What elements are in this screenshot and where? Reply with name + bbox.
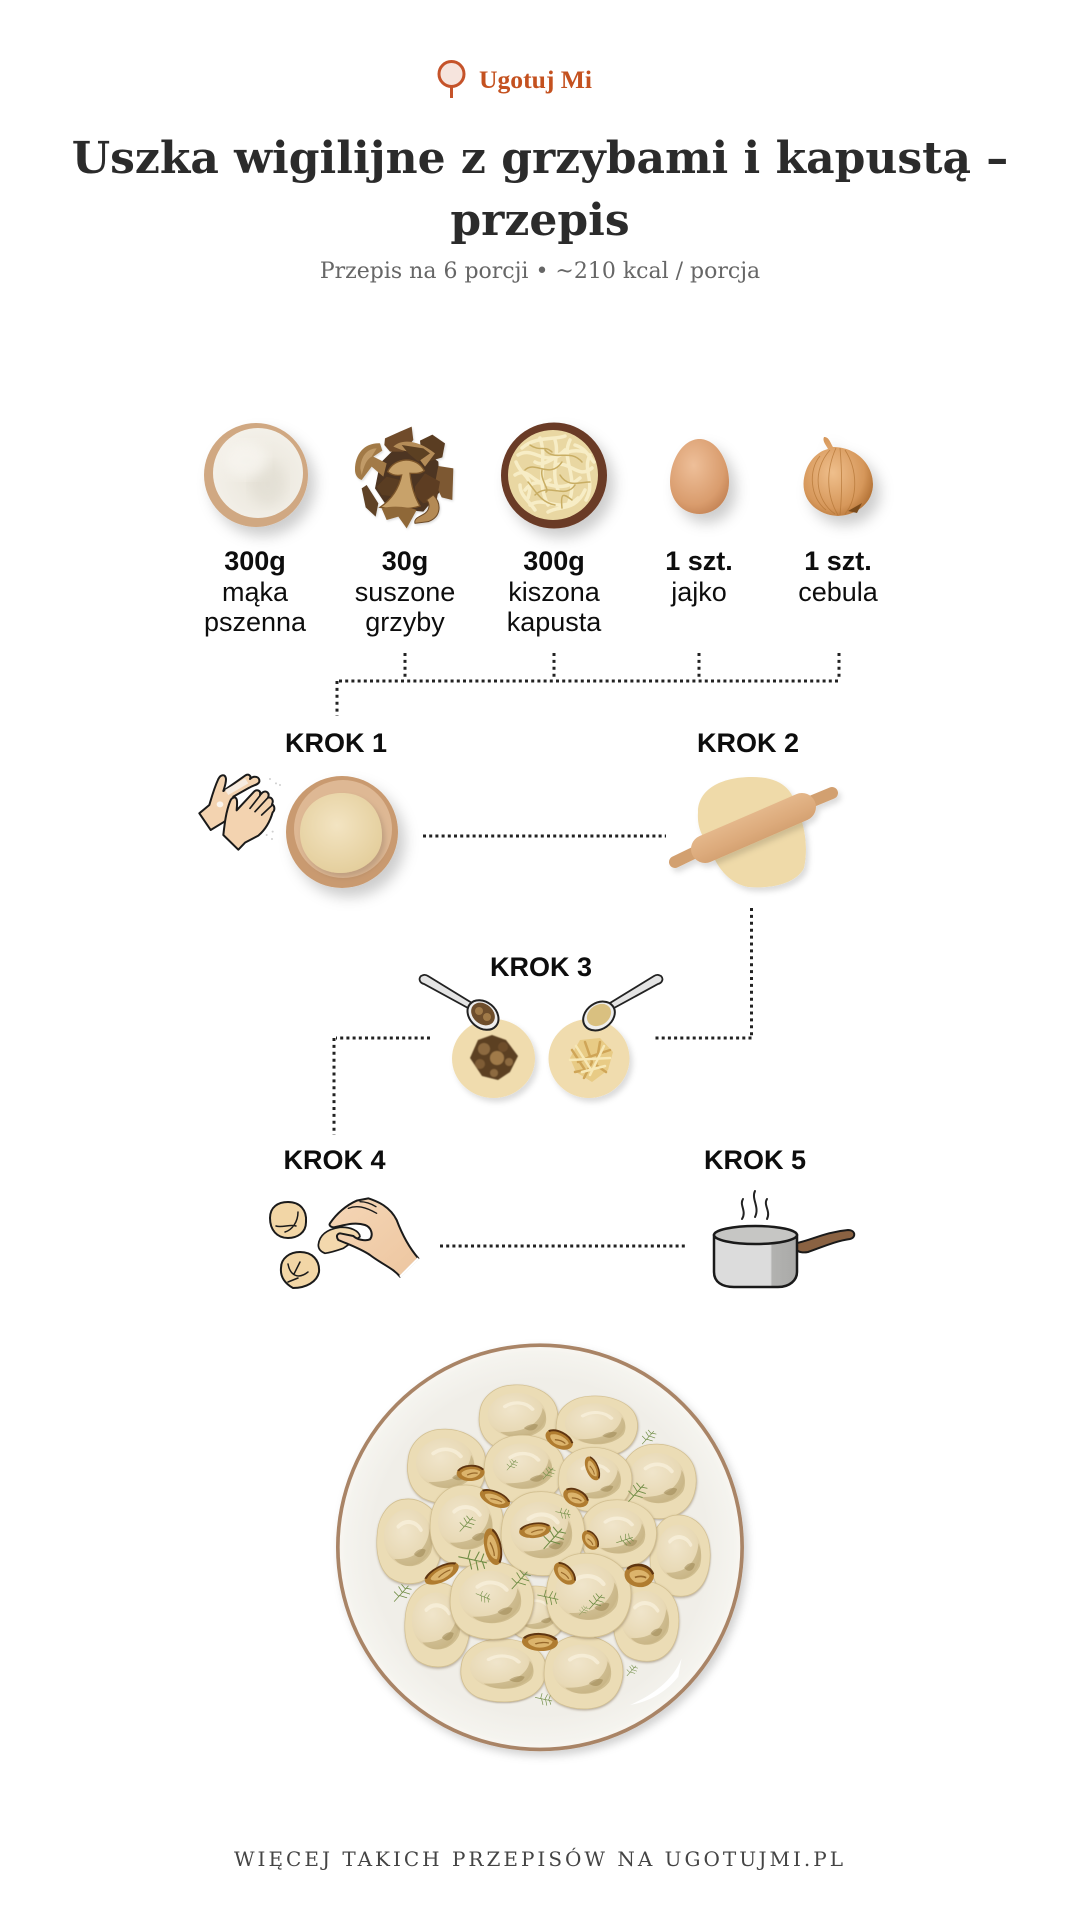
- icon: dough in wooden bowl: [286, 776, 398, 888]
- label: flour: mąka: [222, 577, 289, 607]
- connector: ingredients to step 1: [337, 653, 839, 716]
- label: flour: [204, 546, 307, 637]
- label: mushrooms: 30g: [382, 546, 428, 576]
- label: sauerkraut: 300g: [523, 546, 585, 576]
- icon: dumpling bottom: [281, 1252, 319, 1288]
- label: egg: jajko: [670, 577, 727, 607]
- label: onion: cebula: [798, 577, 879, 607]
- icon: hands kneading: [199, 775, 281, 850]
- connector: step 3 to step 4: [334, 1038, 430, 1135]
- dill: [394, 1430, 656, 1709]
- title: przepis: [450, 195, 630, 246]
- icon: dough disc with cabbage filling: [548, 1019, 630, 1098]
- label: egg: 1 szt.: [665, 546, 733, 576]
- finished dish: plate of dumplings: [336, 1343, 744, 1751]
- label: flour: pszenna: [204, 607, 307, 637]
- label: onion: 1 szt.: [804, 546, 872, 576]
- subtitle: Przepis na 6 porcji • ~210 kcal / porcja: [320, 259, 760, 284]
- icon: onion: [804, 437, 873, 516]
- heading: KROK 4: KROK 4: [283, 1145, 386, 1175]
- icon: dough disc with mushroom filling: [452, 1019, 535, 1098]
- icon: spoon with cabbage filling: [578, 975, 662, 1036]
- ingredient: mushrooms: [355, 427, 455, 637]
- icon: ladle logo: [439, 62, 464, 98]
- connector: step 1 to step 2: [423, 834, 666, 838]
- heading: KROK 5: KROK 5: [704, 1145, 806, 1175]
- icon: sauerkraut bowl: [501, 422, 607, 528]
- ingredient: sauerkraut: [501, 422, 607, 637]
- label: sauerkraut: kiszona: [508, 577, 601, 607]
- icon: rolled dough with rolling pin: [675, 777, 832, 887]
- dumplings: [377, 1385, 710, 1709]
- footer: WIĘCEJ TAKICH PRZEPISÓW NA UGOTUJMI.PL: [234, 1846, 846, 1871]
- label: flour: 300g: [224, 546, 286, 576]
- label: onion: [798, 546, 879, 607]
- logo: [439, 62, 592, 98]
- step 1: [199, 728, 398, 888]
- heading: KROK 3: KROK 3: [490, 952, 592, 982]
- connector: step 4 to step 5: [440, 1244, 686, 1248]
- label: sauerkraut: [507, 546, 602, 637]
- heading: KROK 1: KROK 1: [285, 728, 387, 758]
- step 2: [675, 728, 832, 887]
- label: mushrooms: suszone: [355, 577, 455, 607]
- step 3: [420, 952, 662, 1098]
- icon: dumpling top: [270, 1202, 306, 1238]
- fried onions: [422, 1425, 656, 1652]
- icon: hand pinching dumpling: [318, 1198, 418, 1277]
- connector: step 2 to step 3: [655, 908, 752, 1038]
- step 4: [270, 1145, 418, 1288]
- ingredient: onion: [798, 437, 879, 607]
- icon: flour bowl: [204, 423, 308, 527]
- label: mushrooms: grzyby: [365, 607, 445, 637]
- label: mushrooms: [355, 546, 455, 637]
- plate: [336, 1343, 744, 1751]
- label: sauerkraut: kapusta: [507, 607, 602, 637]
- ingredient: flour: [204, 423, 308, 637]
- step 5: [704, 1145, 854, 1287]
- icon: egg: [670, 439, 729, 514]
- label: egg: [665, 546, 733, 607]
- ingredient: egg: [665, 439, 733, 607]
- icon: steam: [742, 1191, 768, 1219]
- icon: pot with handle: [714, 1226, 854, 1287]
- title: Uszka wigilijne z grzybami i kapustą –: [72, 133, 1008, 184]
- brand name: Ugotuj Mi: [479, 65, 592, 94]
- icon: spoon with mushroom filling: [420, 975, 504, 1036]
- heading: KROK 2: KROK 2: [697, 728, 799, 758]
- icon: dried mushrooms: [355, 427, 453, 528]
